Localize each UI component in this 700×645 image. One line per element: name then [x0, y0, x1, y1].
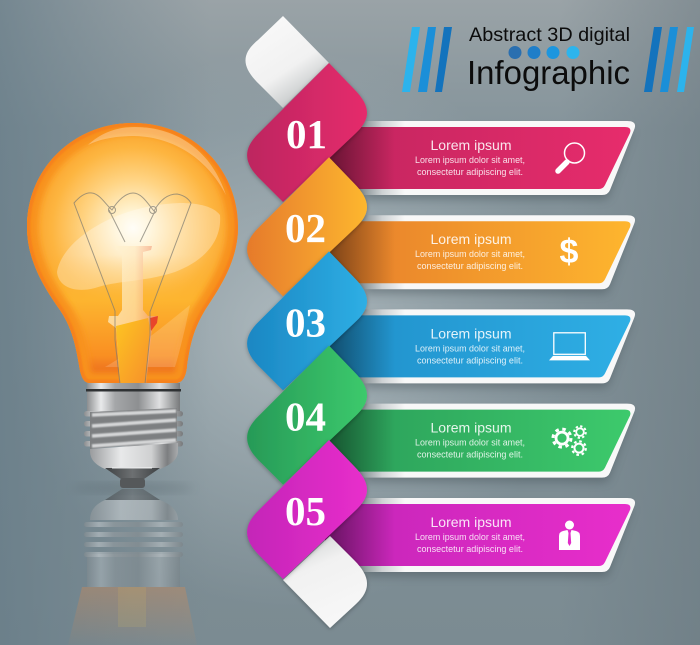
bulb glass	[27, 123, 238, 383]
band 04: Lorem ipsum dolor sit amet,	[415, 438, 525, 448]
number 05: 05	[285, 488, 326, 534]
ribbon tile 05	[247, 440, 367, 579]
band 01: Lorem ipsum dolor sit amet,	[415, 155, 525, 165]
ribbon tile 02	[247, 157, 367, 296]
band 04	[325, 404, 635, 482]
band 01: consectetur adipiscing elit.	[417, 167, 523, 177]
ribbon tile 01	[247, 63, 367, 202]
ribbon tile 04	[247, 346, 367, 485]
icon: right blue stripes	[644, 27, 694, 92]
filament stem	[108, 246, 158, 384]
text: Lorem ipsum	[430, 231, 512, 247]
contact shadow	[73, 484, 193, 492]
band 02: Lorem ipsum dolor sit amet,	[415, 249, 525, 259]
glass highlights	[88, 127, 226, 195]
text: Lorem ipsum	[430, 420, 512, 436]
title	[402, 24, 694, 92]
light bulb	[20, 115, 245, 492]
ribbon tile 03	[247, 251, 367, 390]
band 02: consectetur adipiscing elit.	[417, 261, 523, 271]
light bulb reflection	[68, 489, 197, 645]
band 01	[325, 121, 635, 199]
icon: four dots	[508, 46, 580, 59]
base cone	[105, 468, 160, 479]
number 03: 03	[285, 299, 326, 345]
icon: person	[559, 520, 580, 550]
number 04: 04	[285, 394, 326, 440]
band 05	[325, 498, 635, 576]
number 02: 02	[285, 205, 326, 251]
band 03: consectetur adipiscing elit.	[417, 355, 523, 365]
white ribbon end: top	[245, 16, 329, 108]
heading: Infographic: Infographic	[467, 54, 630, 91]
band 05: Lorem ipsum dolor sit amet,	[415, 532, 525, 542]
band 03	[325, 309, 635, 387]
band 02	[325, 215, 635, 293]
screw base	[84, 383, 183, 488]
icon: dollar: $	[560, 233, 579, 271]
icon: magnifier	[558, 143, 584, 171]
band 03: Lorem ipsum dolor sit amet,	[415, 343, 525, 353]
white ribbon end: bottom	[283, 536, 367, 628]
text: Lorem ipsum	[430, 325, 512, 341]
filament wire	[74, 193, 191, 384]
band 05: consectetur adipiscing elit.	[417, 544, 523, 554]
icon: laptop	[549, 333, 590, 360]
icon: left blue stripes	[402, 27, 452, 92]
icon: gears	[553, 426, 586, 455]
text: Lorem ipsum	[430, 137, 512, 153]
band 04: consectetur adipiscing elit.	[417, 450, 523, 460]
number 01: 01	[286, 111, 327, 157]
heading: Abstract 3D digital: Abstract 3D digital	[469, 24, 630, 46]
text: Lorem ipsum	[430, 514, 512, 530]
